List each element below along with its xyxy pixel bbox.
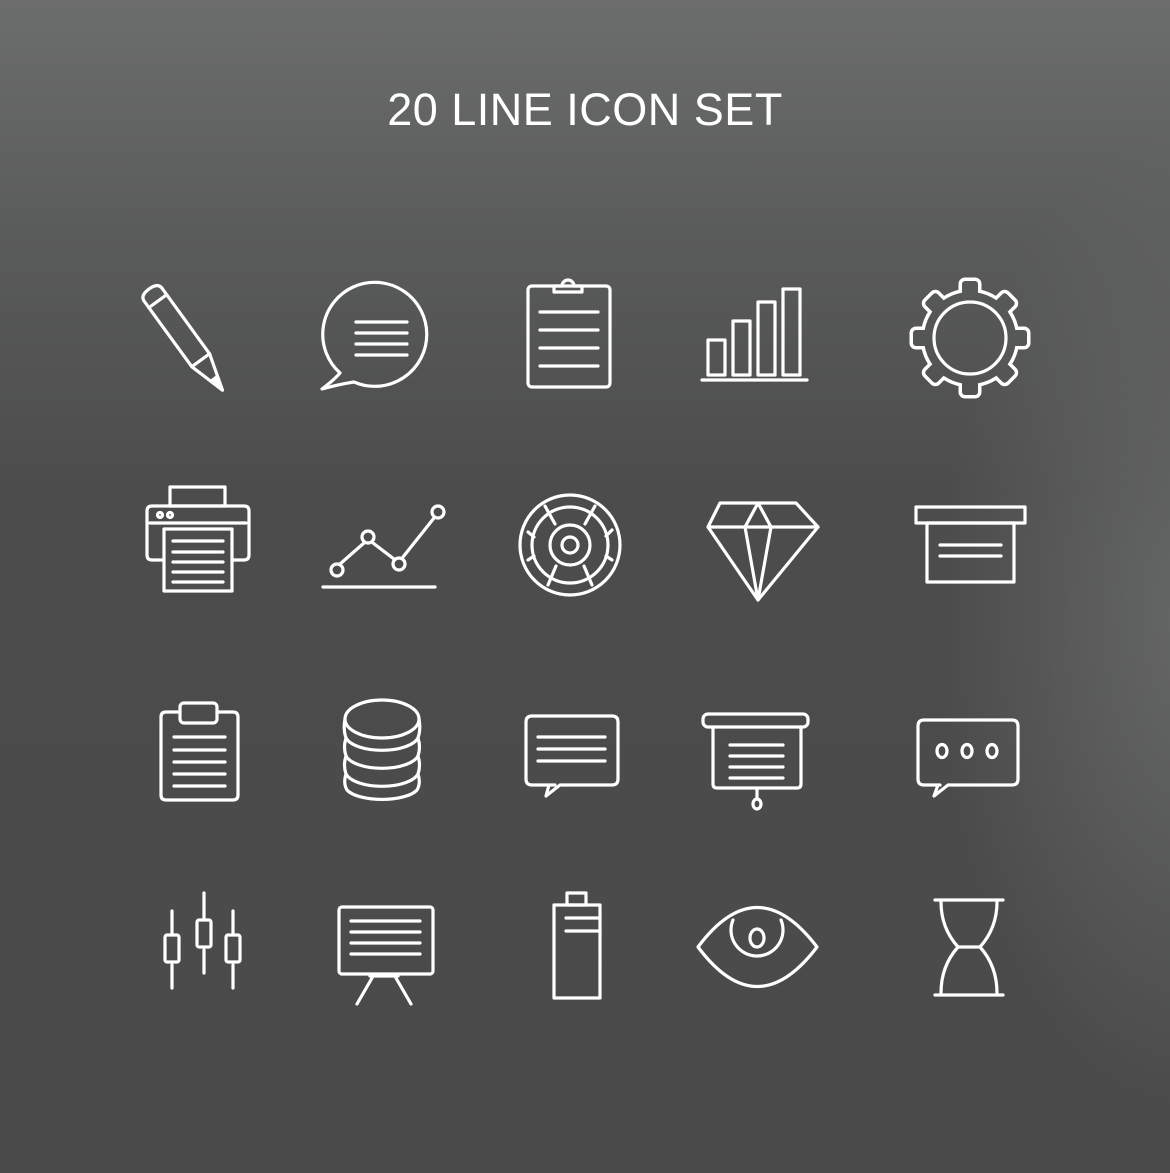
icon: chip [520,495,620,595]
title: 20 LINE ICON SET [387,84,783,135]
icon: gear [910,278,1030,398]
icon: printer [147,487,249,591]
icon: database stack [344,700,420,799]
icon: eye [698,908,817,986]
icon: message box [526,716,618,796]
icon: pencil [140,283,231,397]
icon: battery [554,893,600,998]
icon: projector screen [703,714,808,809]
icon: speech bubble [322,282,427,389]
icon: chat dots [918,720,1018,796]
icon: bar chart [702,289,807,380]
icon: archive box [916,507,1025,582]
icon: diamond [708,503,818,600]
icon: presentation board [339,907,433,1004]
icon: sliders [165,893,240,988]
icon: clipboard 2 [161,703,238,800]
icon: line chart [323,506,444,587]
icon: hourglass [935,900,1003,995]
icon: clipboard [528,280,610,387]
